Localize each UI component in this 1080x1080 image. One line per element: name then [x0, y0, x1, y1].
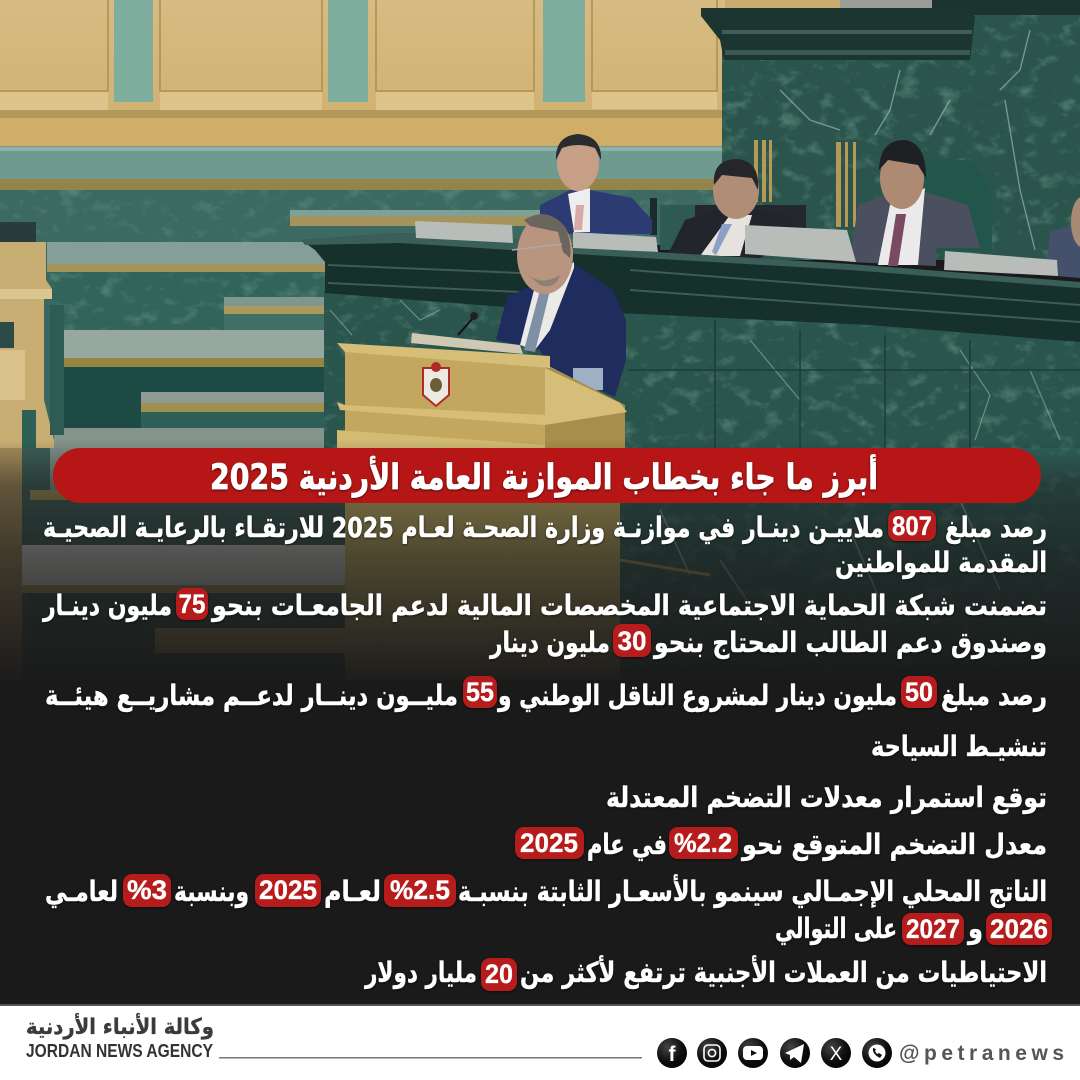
bullet 7: foreign reserves: 20 — [485, 959, 513, 989]
bullet 6: GDP growth: على التوالي — [775, 912, 897, 945]
icon: telegram — [780, 1038, 810, 1068]
bullet 3: national carrier and tourism: 55 — [466, 677, 494, 707]
bullet 6: GDP growth: لعامـي — [45, 875, 118, 908]
bullet 6: GDP growth: %3 — [127, 875, 167, 905]
social handle: @petranews — [899, 1042, 1064, 1065]
bullet 2: social protection: مليون دينار — [488, 626, 610, 659]
dark gradient overlay — [0, 440, 1080, 1006]
emblem — [423, 362, 449, 406]
seated man 3 with green chair — [850, 140, 992, 266]
icon: facebook: f — [668, 1043, 676, 1066]
bullet 6: GDP growth: وبنسبة — [174, 875, 249, 908]
bullet 7: foreign reserves: مليار دولار — [363, 956, 477, 989]
bullet 1: health budget: رصد مبلغ — [945, 511, 1047, 544]
seated man 4 — [1045, 197, 1080, 278]
bullet 6: GDP growth: 2027 — [906, 914, 960, 944]
bullet 1: health budget: 807 — [892, 511, 932, 541]
bullet 3: national carrier and tourism: رصد مبلغ — [941, 679, 1047, 712]
left lectern — [0, 242, 54, 450]
wood wall — [0, 0, 725, 146]
bullet 3: national carrier and tourism — [45, 676, 1047, 763]
seated man 1 — [540, 134, 657, 235]
bullet 2: social protection — [41, 588, 1047, 660]
bullet 6: GDP growth: لعـام — [324, 875, 381, 908]
bullet 3: national carrier and tourism: مليون دينار لمشروع الناقل الوطني و — [496, 679, 897, 712]
agency logo text — [26, 1012, 214, 1061]
lectern with emblem — [337, 343, 627, 448]
title text: أبرز ما جاء بخطاب الموازنة العامة الأردنية 2025 — [210, 454, 878, 498]
upper right marble — [722, 14, 1080, 260]
bullet 6: GDP growth: %2.5 — [390, 875, 450, 905]
bullet 7: foreign reserves — [363, 955, 1047, 991]
bullet 5: expected inflation: 2025 — [520, 828, 578, 858]
bullet 3: national carrier and tourism: 50 — [905, 677, 933, 707]
monitors — [415, 221, 1058, 276]
bullet 2: social protection: 75 — [178, 589, 206, 619]
bullet 5: expected inflation: %2.2 — [674, 828, 732, 858]
agency logo text: JORDAN NEWS AGENCY — [26, 1041, 213, 1061]
icon: whatsapp — [862, 1038, 892, 1068]
bullet 6: GDP growth: و — [966, 912, 983, 945]
bullet 2: social protection: مليون دينـار — [41, 589, 172, 622]
bullet 1: health budget: ملاييـن دينـار في موازنـة وزارة الصحـة لعـام 2025 للارتقـاء بالرعايـة الصحيـة — [43, 511, 884, 544]
bullet 2: social protection: 30 — [618, 626, 646, 656]
bullet 3: national carrier and tourism: مليــون دينــار لدعــم مشاريــع هيئــة — [45, 679, 458, 712]
footer — [0, 1004, 1080, 1080]
icon: x: X — [830, 1044, 843, 1065]
icon: x — [821, 1038, 851, 1068]
teal ledge — [0, 146, 725, 179]
bullet 1: health budget — [43, 510, 1047, 579]
icon: youtube — [738, 1038, 768, 1068]
bullet 6: GDP growth — [45, 874, 1052, 945]
lower photo continuation (darkened by overlay) — [0, 448, 345, 680]
bullet 6: GDP growth: 2026 — [990, 914, 1048, 944]
stepped floor left — [0, 242, 330, 448]
icon: instagram — [697, 1038, 727, 1068]
seated man 2 — [660, 159, 806, 258]
main marble desk — [324, 290, 1080, 448]
speaker — [411, 214, 626, 397]
gold stripes — [754, 140, 856, 227]
title banner — [53, 448, 1041, 503]
agency logo text: وكالة الأنباء الأردنية — [26, 1012, 214, 1040]
bullet 5: expected inflation: في عام — [587, 828, 667, 861]
bullet 5: expected inflation — [515, 827, 1047, 861]
bullet 6: GDP growth: 2025 — [259, 875, 317, 905]
icon: facebook — [657, 1038, 687, 1068]
